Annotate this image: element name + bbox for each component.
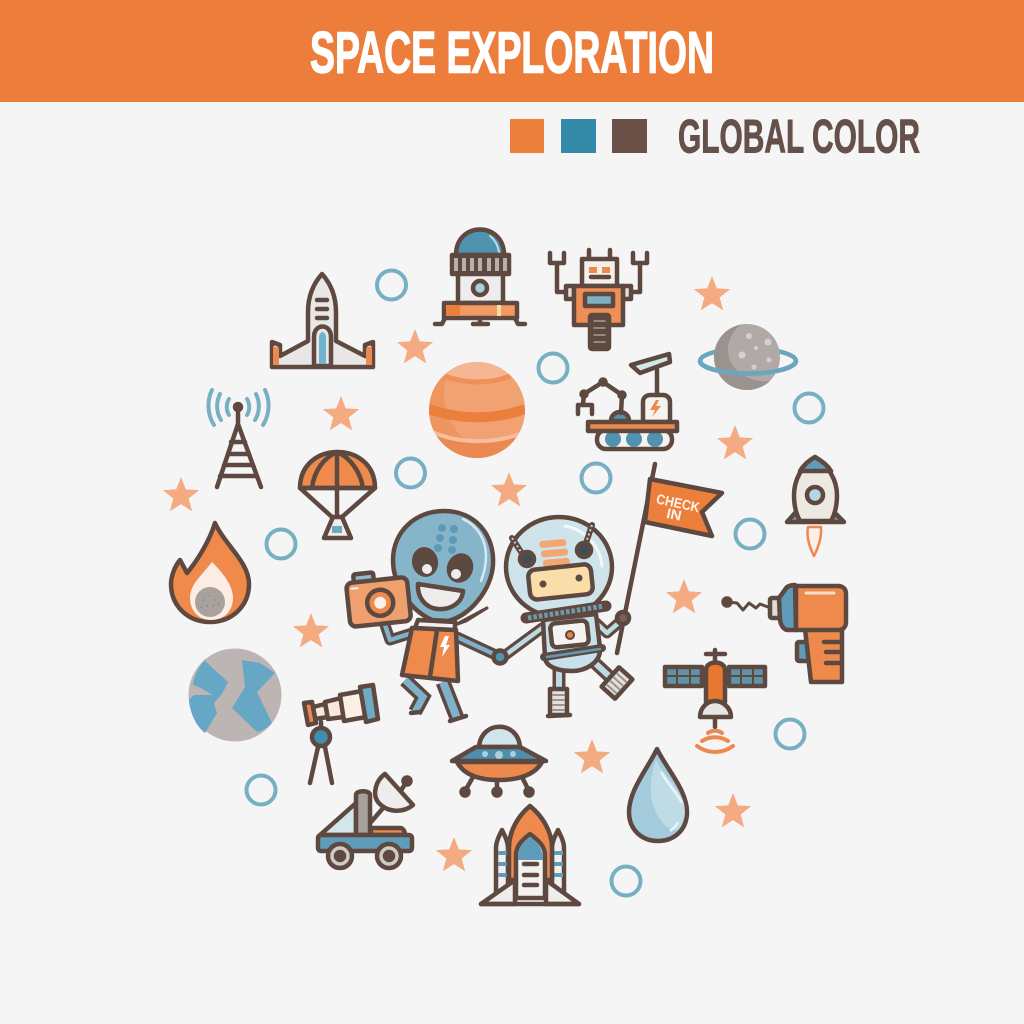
robot chest panel xyxy=(550,620,589,648)
icon: satellite xyxy=(665,650,765,752)
antennas xyxy=(512,525,592,558)
robot right boot xyxy=(602,667,632,699)
flag text: IN xyxy=(665,505,683,524)
icon: electric drill xyxy=(724,585,846,682)
robot legs xyxy=(559,663,610,690)
icon: winged rocket xyxy=(272,274,373,367)
icon: parachute capsule xyxy=(300,452,375,538)
robot body xyxy=(543,614,600,671)
flag text: CHECK xyxy=(655,491,701,515)
icon: space shuttle xyxy=(481,806,579,904)
icon: ringed planet xyxy=(700,324,796,390)
icon: striped orange planet xyxy=(429,362,525,458)
vest bolt xyxy=(440,636,450,657)
swatch: blue xyxy=(561,119,596,153)
alien collar flap xyxy=(455,608,487,625)
rings xyxy=(246,270,824,896)
icon: planet rover xyxy=(578,354,677,449)
icon: observatory lander xyxy=(435,230,525,324)
character: alien with camera xyxy=(345,511,506,721)
icon: robot xyxy=(550,250,647,349)
title: SPACE EXPLORATION xyxy=(310,20,714,86)
helmet stripes xyxy=(539,539,570,567)
alien neck xyxy=(415,620,455,630)
icon: water drop xyxy=(629,749,687,841)
swatch: orange xyxy=(510,119,544,153)
alien legs xyxy=(405,680,423,712)
robot left boot xyxy=(550,689,567,715)
flag xyxy=(645,479,722,536)
icon: flying saucer xyxy=(452,727,546,796)
alien mouth xyxy=(418,584,463,609)
alien vest xyxy=(402,628,458,681)
alien head xyxy=(393,511,493,621)
stars xyxy=(163,276,753,871)
swatch: brown xyxy=(612,119,647,153)
flag pole xyxy=(617,464,655,653)
icon: small rocket xyxy=(787,457,844,556)
character: robot astronaut with flag xyxy=(504,464,722,716)
flag text xyxy=(652,491,701,527)
robot left arm xyxy=(504,628,542,656)
robot helmet xyxy=(506,517,612,617)
icon: cracked earth xyxy=(188,648,282,742)
alien eyes xyxy=(409,545,441,579)
robot belt xyxy=(544,648,602,657)
robot face xyxy=(528,564,593,600)
robot hand xyxy=(617,612,629,624)
header band xyxy=(0,0,1024,102)
robot right arm xyxy=(593,620,622,633)
alien arms xyxy=(385,625,412,640)
legend: global color xyxy=(510,110,920,162)
icon: flame with rock xyxy=(171,523,249,622)
alien head spots xyxy=(434,524,458,554)
robot collar xyxy=(526,606,606,618)
icon: radio tower xyxy=(208,390,269,487)
icon: telescope on tripod xyxy=(304,685,378,783)
icon: satellite dish buggy xyxy=(318,774,413,868)
camera xyxy=(345,569,411,627)
clasped hands xyxy=(494,650,506,664)
